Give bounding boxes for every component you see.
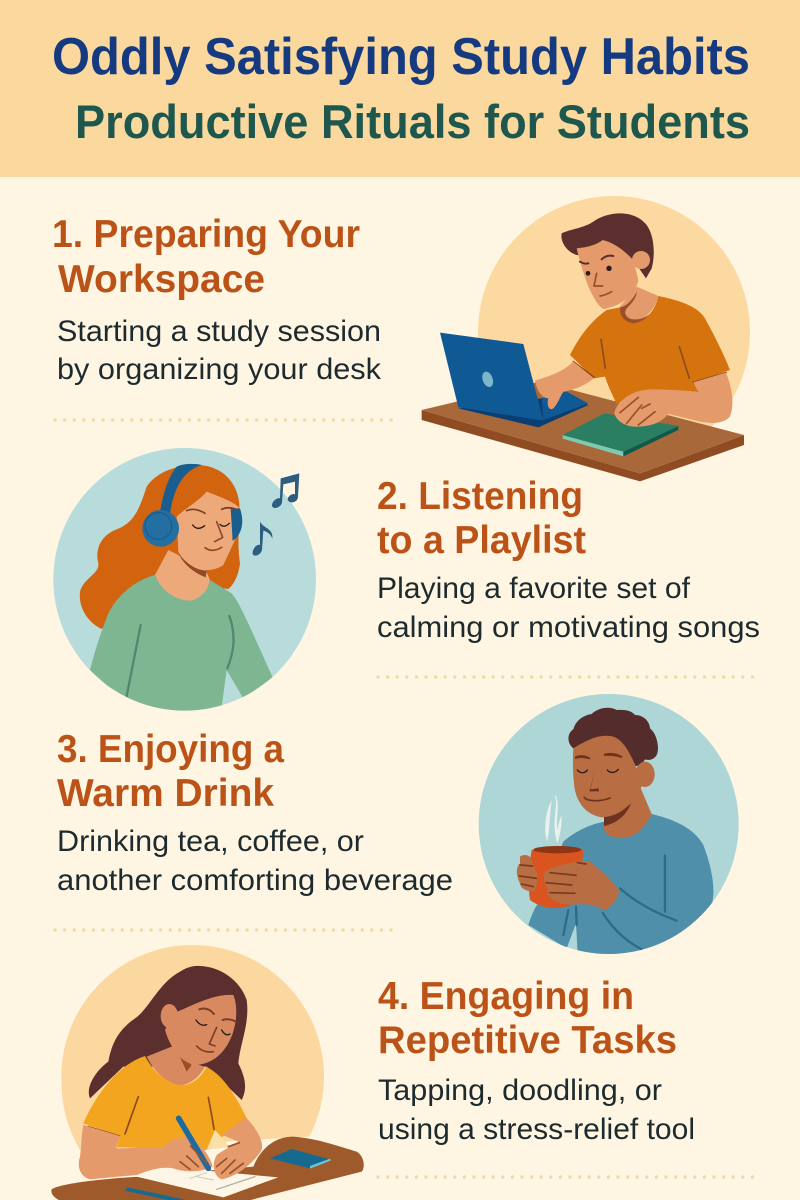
description 3: another comforting beverage — [57, 864, 453, 897]
title: Oddly Satisfying Study Habits — [52, 28, 750, 86]
description 2: calming or motivating songs — [377, 611, 760, 644]
heading 1: 1. Preparing Your — [52, 213, 360, 256]
panel: 3 enjoying a warm drink text — [57, 728, 453, 897]
description 3: Drinking tea, coffee, or — [57, 825, 364, 858]
description 1: Starting a study session — [57, 315, 381, 348]
icon: student with warm drink — [479, 694, 739, 967]
panel: 4 engaging in repetitive tasks text — [378, 975, 695, 1146]
description 4: Tapping, doodling, or — [378, 1074, 662, 1107]
panel: 1 preparing your workspace text — [52, 213, 381, 386]
heading 4: Repetitive Tasks — [378, 1019, 677, 1062]
subtitle: Productive Rituals for Students — [75, 95, 750, 148]
heading 3: 3. Enjoying a — [57, 728, 284, 771]
heading 2 — [377, 475, 586, 562]
icon: student at laptop — [422, 196, 750, 481]
heading 3 — [57, 728, 284, 815]
heading 1 — [52, 213, 360, 301]
heading 4 — [378, 975, 677, 1062]
description 2: Playing a favorite set of — [377, 572, 691, 605]
heading 3: Warm Drink — [57, 772, 274, 815]
description 3 — [57, 825, 453, 897]
description 2 — [377, 572, 760, 644]
heading 1: Workspace — [58, 258, 265, 301]
header banner — [0, 0, 800, 177]
description 1: by organizing your desk — [57, 353, 381, 386]
description 4 — [378, 1074, 695, 1146]
heading 2: to a Playlist — [377, 519, 586, 562]
description 4: using a stress-relief tool — [378, 1113, 695, 1146]
description 1 — [57, 315, 381, 386]
heading 4: 4. Engaging in — [378, 975, 634, 1018]
heading 2: 2. Listening — [377, 475, 583, 518]
icon: student with headphones — [53, 448, 316, 717]
icon: student doodling — [51, 945, 364, 1200]
panel: 2 listening to a playlist text — [377, 475, 760, 644]
